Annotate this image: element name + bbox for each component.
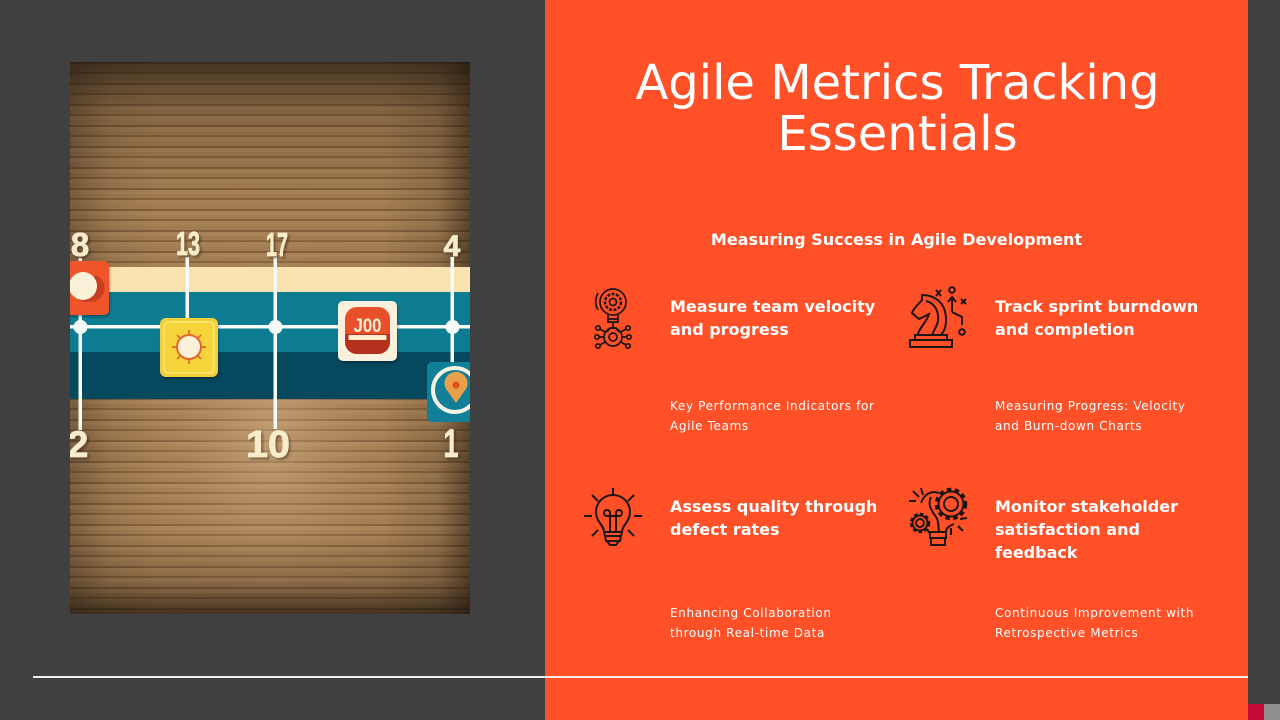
item description: stakeholder: Continuous Improvement with Retrospective Metrics (995, 606, 1194, 640)
timeline numbers: 4 (444, 230, 461, 263)
item heading: burndown: Track sprint burndown and completion (995, 297, 1198, 339)
corner accent: crimson square (1248, 704, 1264, 720)
title (635, 55, 1160, 162)
subtitle: Measuring Success in Agile Development (711, 230, 1082, 249)
icon: lightbulb with circuit (594, 288, 632, 349)
corner accent: grey square (1264, 704, 1280, 720)
image: wooden timeline illustration (70, 62, 470, 614)
timeline lines and nodes (70, 257, 470, 430)
timeline numbers: 8 (71, 226, 89, 263)
wood texture (70, 62, 470, 614)
footer rule (33, 676, 1248, 678)
icon: 100 badge tile: J00 (354, 316, 382, 337)
item heading: velocity: Measure team velocity and progress (670, 297, 875, 339)
item description: quality: Enhancing Collaboration through Real-time Data (670, 606, 832, 640)
item heading: quality: Assess quality through defect rates (670, 497, 877, 539)
item heading: stakeholder: Monitor stakeholder satisfaction and feedback (995, 497, 1178, 562)
timeline numbers: 1 (444, 422, 458, 466)
timeline numbers: 17 (266, 226, 288, 263)
icon: lightbulb with gears (909, 488, 968, 546)
timeline numbers (68, 225, 461, 466)
icon: location pin tile (427, 362, 487, 422)
item description: burndown: Measuring Progress: Velocity and Burn-down Charts (995, 399, 1186, 433)
icon: yellow sun tile (160, 318, 218, 377)
timeline colour bands (70, 267, 470, 399)
title: Agile Metrics Tracking (635, 55, 1160, 111)
icon: lightbulb idea (584, 488, 642, 546)
icon: orange circle tile (50, 261, 109, 315)
timeline numbers: 10 (246, 424, 290, 466)
item description: velocity: Key Performance Indicators for Agile Teams (670, 399, 875, 433)
timeline numbers: 13 (176, 225, 200, 262)
icon: 100 badge tile (338, 301, 397, 361)
title: Essentials (777, 106, 1018, 162)
icon: chess knight strategy (909, 286, 967, 348)
panel: orange content background (545, 0, 1248, 720)
